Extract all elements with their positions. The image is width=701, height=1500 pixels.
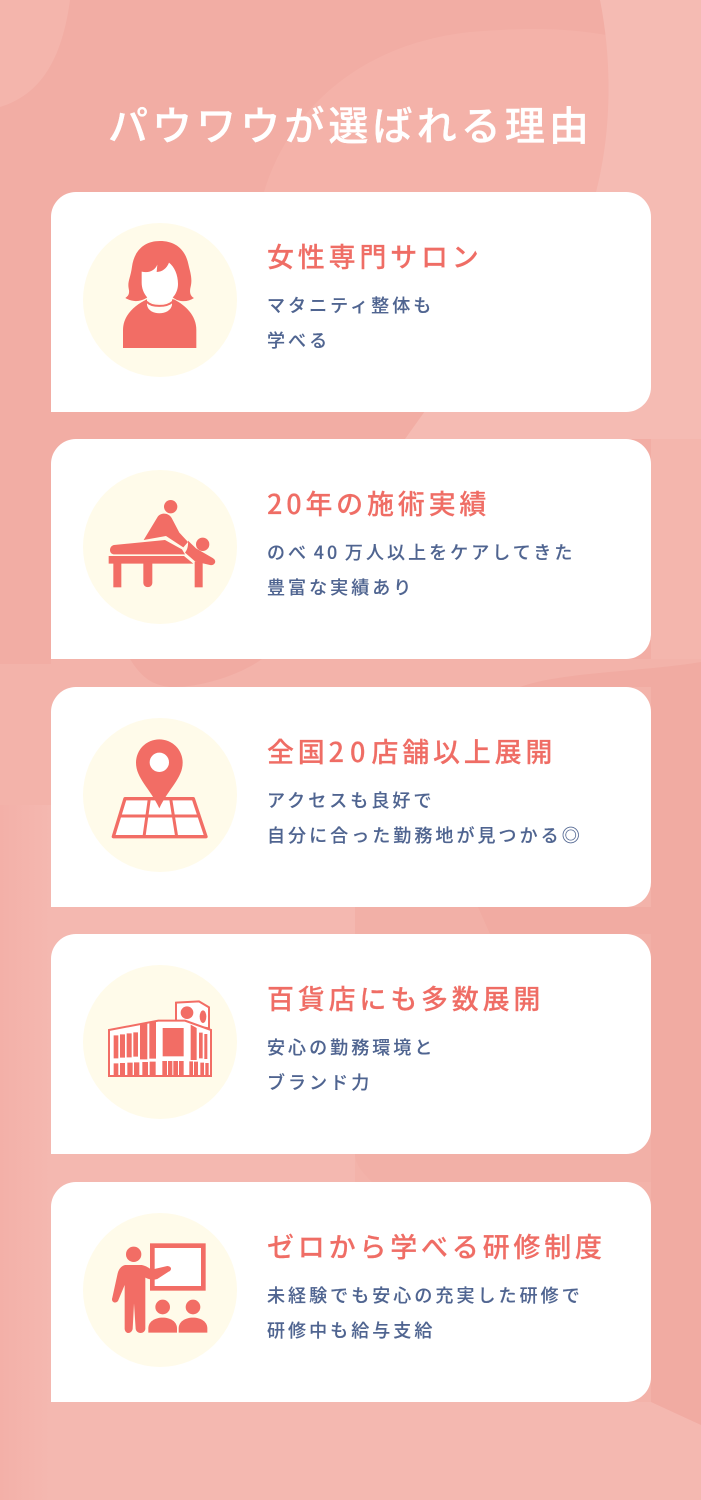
- icon circle: teacher: [83, 1212, 237, 1366]
- icon: department store: [108, 1000, 212, 1077]
- panel: department stores: [51, 934, 651, 1154]
- icon: map pin: [112, 739, 208, 838]
- panel: women-only salon: [51, 192, 651, 412]
- description: 研修中も給与支給: [267, 1316, 435, 1342]
- description: アクセスも良好で: [267, 786, 434, 812]
- icon: woman: [123, 241, 196, 348]
- panel: 20 years of experience: [51, 439, 651, 659]
- description: [267, 786, 583, 848]
- description: [267, 1282, 583, 1342]
- icon circle: massage: [83, 470, 237, 624]
- heading: 女性専門サロン: [267, 236, 483, 274]
- description: マタニティ整体も: [267, 292, 434, 318]
- description: [267, 292, 434, 352]
- heading: 百貨店にも多数展開: [267, 978, 544, 1017]
- description: 学べる: [267, 326, 330, 352]
- icon circle: woman: [83, 222, 237, 376]
- icon circle: department store: [83, 965, 237, 1119]
- description: 安心の勤務環境と: [267, 1034, 435, 1060]
- heading: ゼロから学べる研修制度: [267, 1226, 606, 1264]
- heading: 全国20店舗以上展開: [267, 730, 556, 770]
- description: [267, 1034, 435, 1095]
- description: のべ 40 万人以上をケアしてきた: [267, 539, 575, 565]
- description: [267, 539, 575, 600]
- description: 自分に合った勤務地が見つかる◎: [267, 822, 583, 848]
- panel: training program: [51, 1182, 651, 1402]
- icon: massage: [108, 500, 216, 588]
- description: 未経験でも安心の充実した研修で: [267, 1282, 583, 1308]
- icon: teacher: [112, 1243, 208, 1333]
- panel: 20+ stores nationwide: [51, 686, 651, 906]
- title: パウワウが選ばれる理由: [108, 94, 593, 152]
- icon circle: map pin: [83, 718, 237, 872]
- heading: 20年の施術実績: [267, 483, 490, 522]
- description: ブランド力: [267, 1069, 372, 1095]
- description: 豊富な実績あり: [267, 574, 414, 600]
